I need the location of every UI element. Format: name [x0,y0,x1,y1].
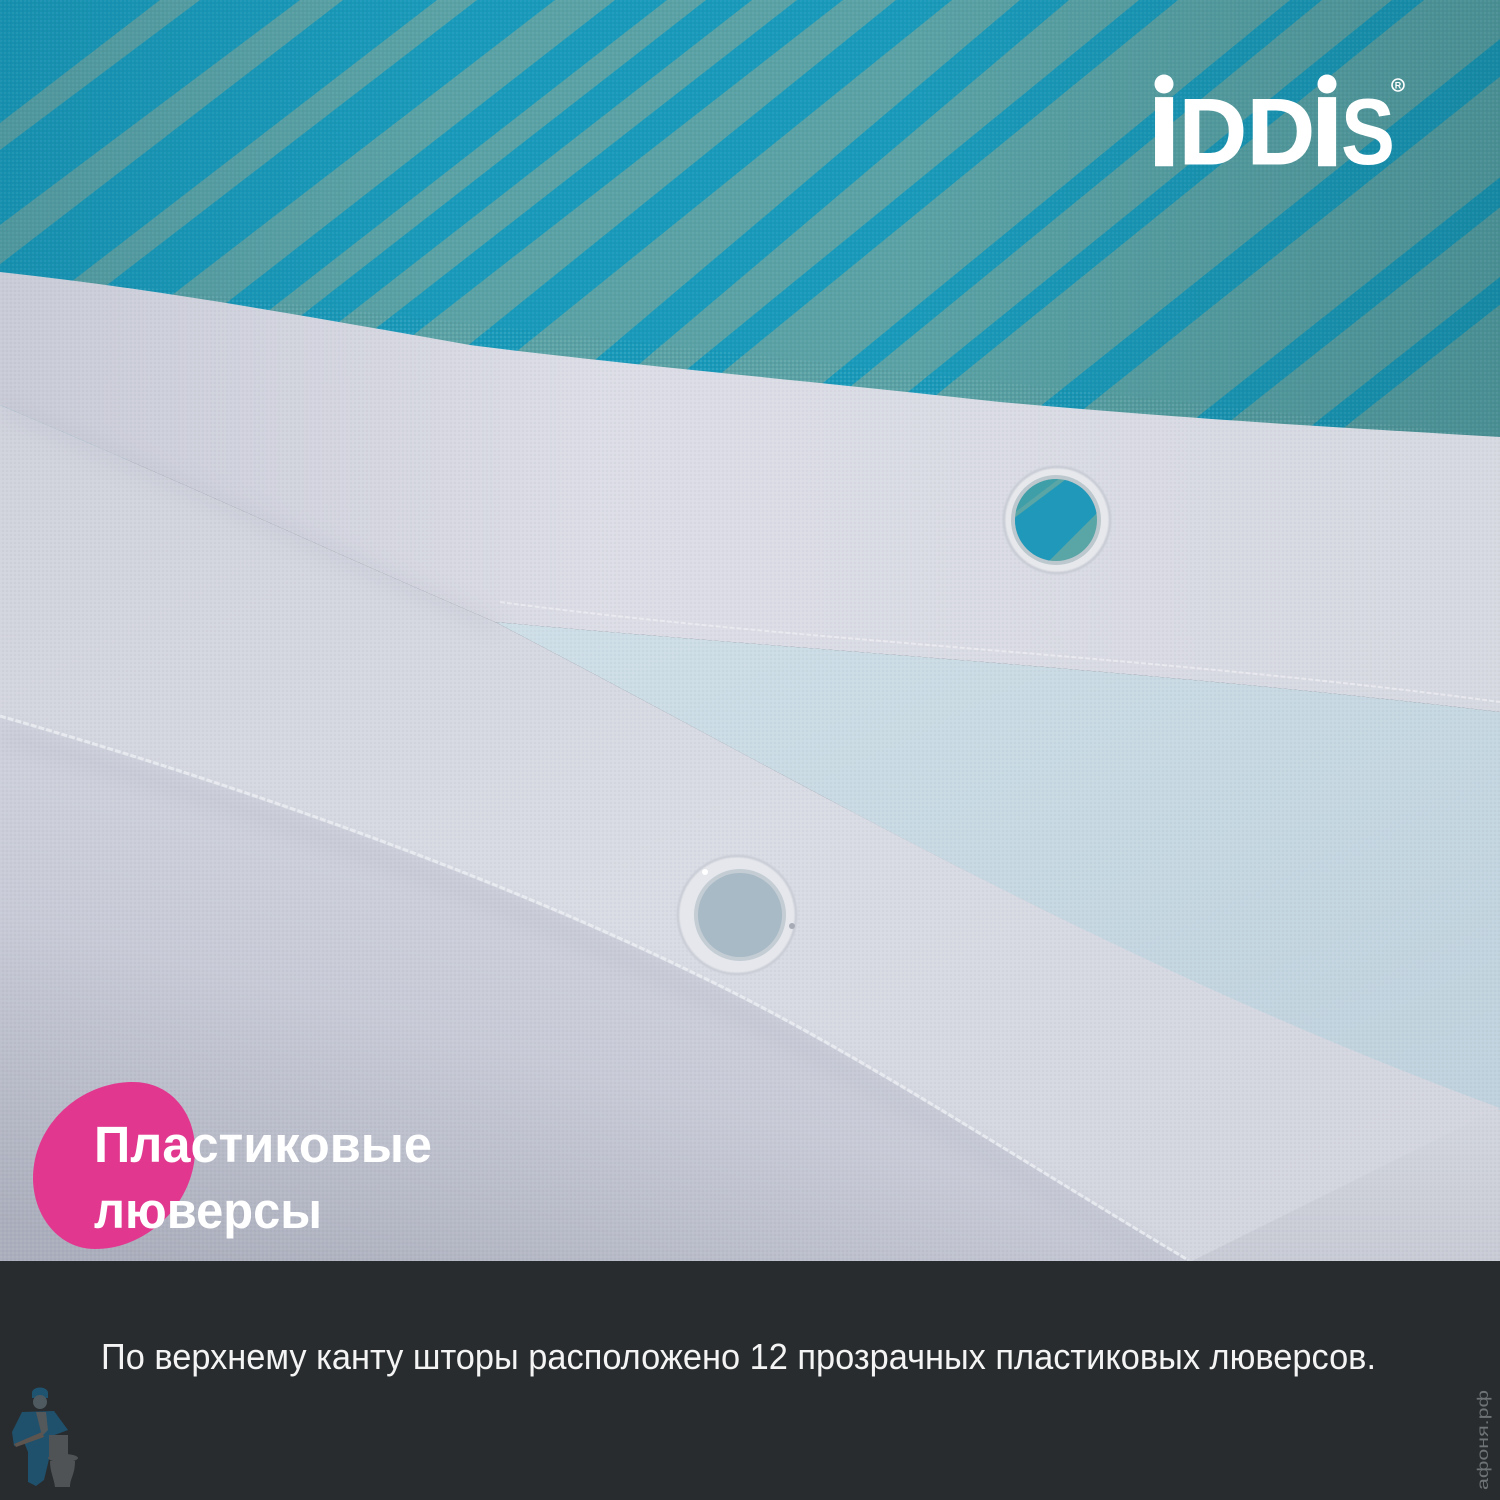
top hem stitching [500,602,1500,702]
registered mark [1392,79,1404,91]
watermark: афоня.рф [1475,1390,1492,1490]
logo final S: S [1341,79,1395,184]
logo dots [1154,74,1336,94]
pale blue inner panel [495,622,1500,1110]
registered mark: R [1395,80,1402,90]
front hem stitching [0,716,1188,1260]
soft shadow beneath hem [0,735,1170,1262]
logo: IDDIS [1151,74,1404,184]
logo letter I: I [1151,79,1177,184]
bottom dark panel [0,1261,1500,1500]
grommet: lower [678,856,796,974]
lower curtain body [0,700,1500,1262]
toilet [48,1435,78,1487]
top hem band [0,272,1500,712]
lower right fabric [1190,1108,1500,1262]
heading [94,1116,432,1239]
heading: люверсы [94,1182,322,1239]
front hem band [0,405,1500,1262]
pink blob accent [33,1082,195,1249]
logo second letter I: I [1314,79,1340,184]
plumber figure [12,1388,68,1486]
logo letters DD: DD [1179,79,1315,184]
heading: Пластиковые [94,1116,432,1173]
fold crease shading [0,408,495,625]
striped teal curtain background [0,0,1500,460]
grommet: upper [1004,467,1110,573]
description text: По верхнему канту шторы расположено 12 прозрачных пластиковых люверсов. [101,1336,1376,1377]
icon: plumber with toilet [12,1388,78,1487]
white curtain fabric [0,272,1500,1262]
weave texture [0,272,1500,1262]
